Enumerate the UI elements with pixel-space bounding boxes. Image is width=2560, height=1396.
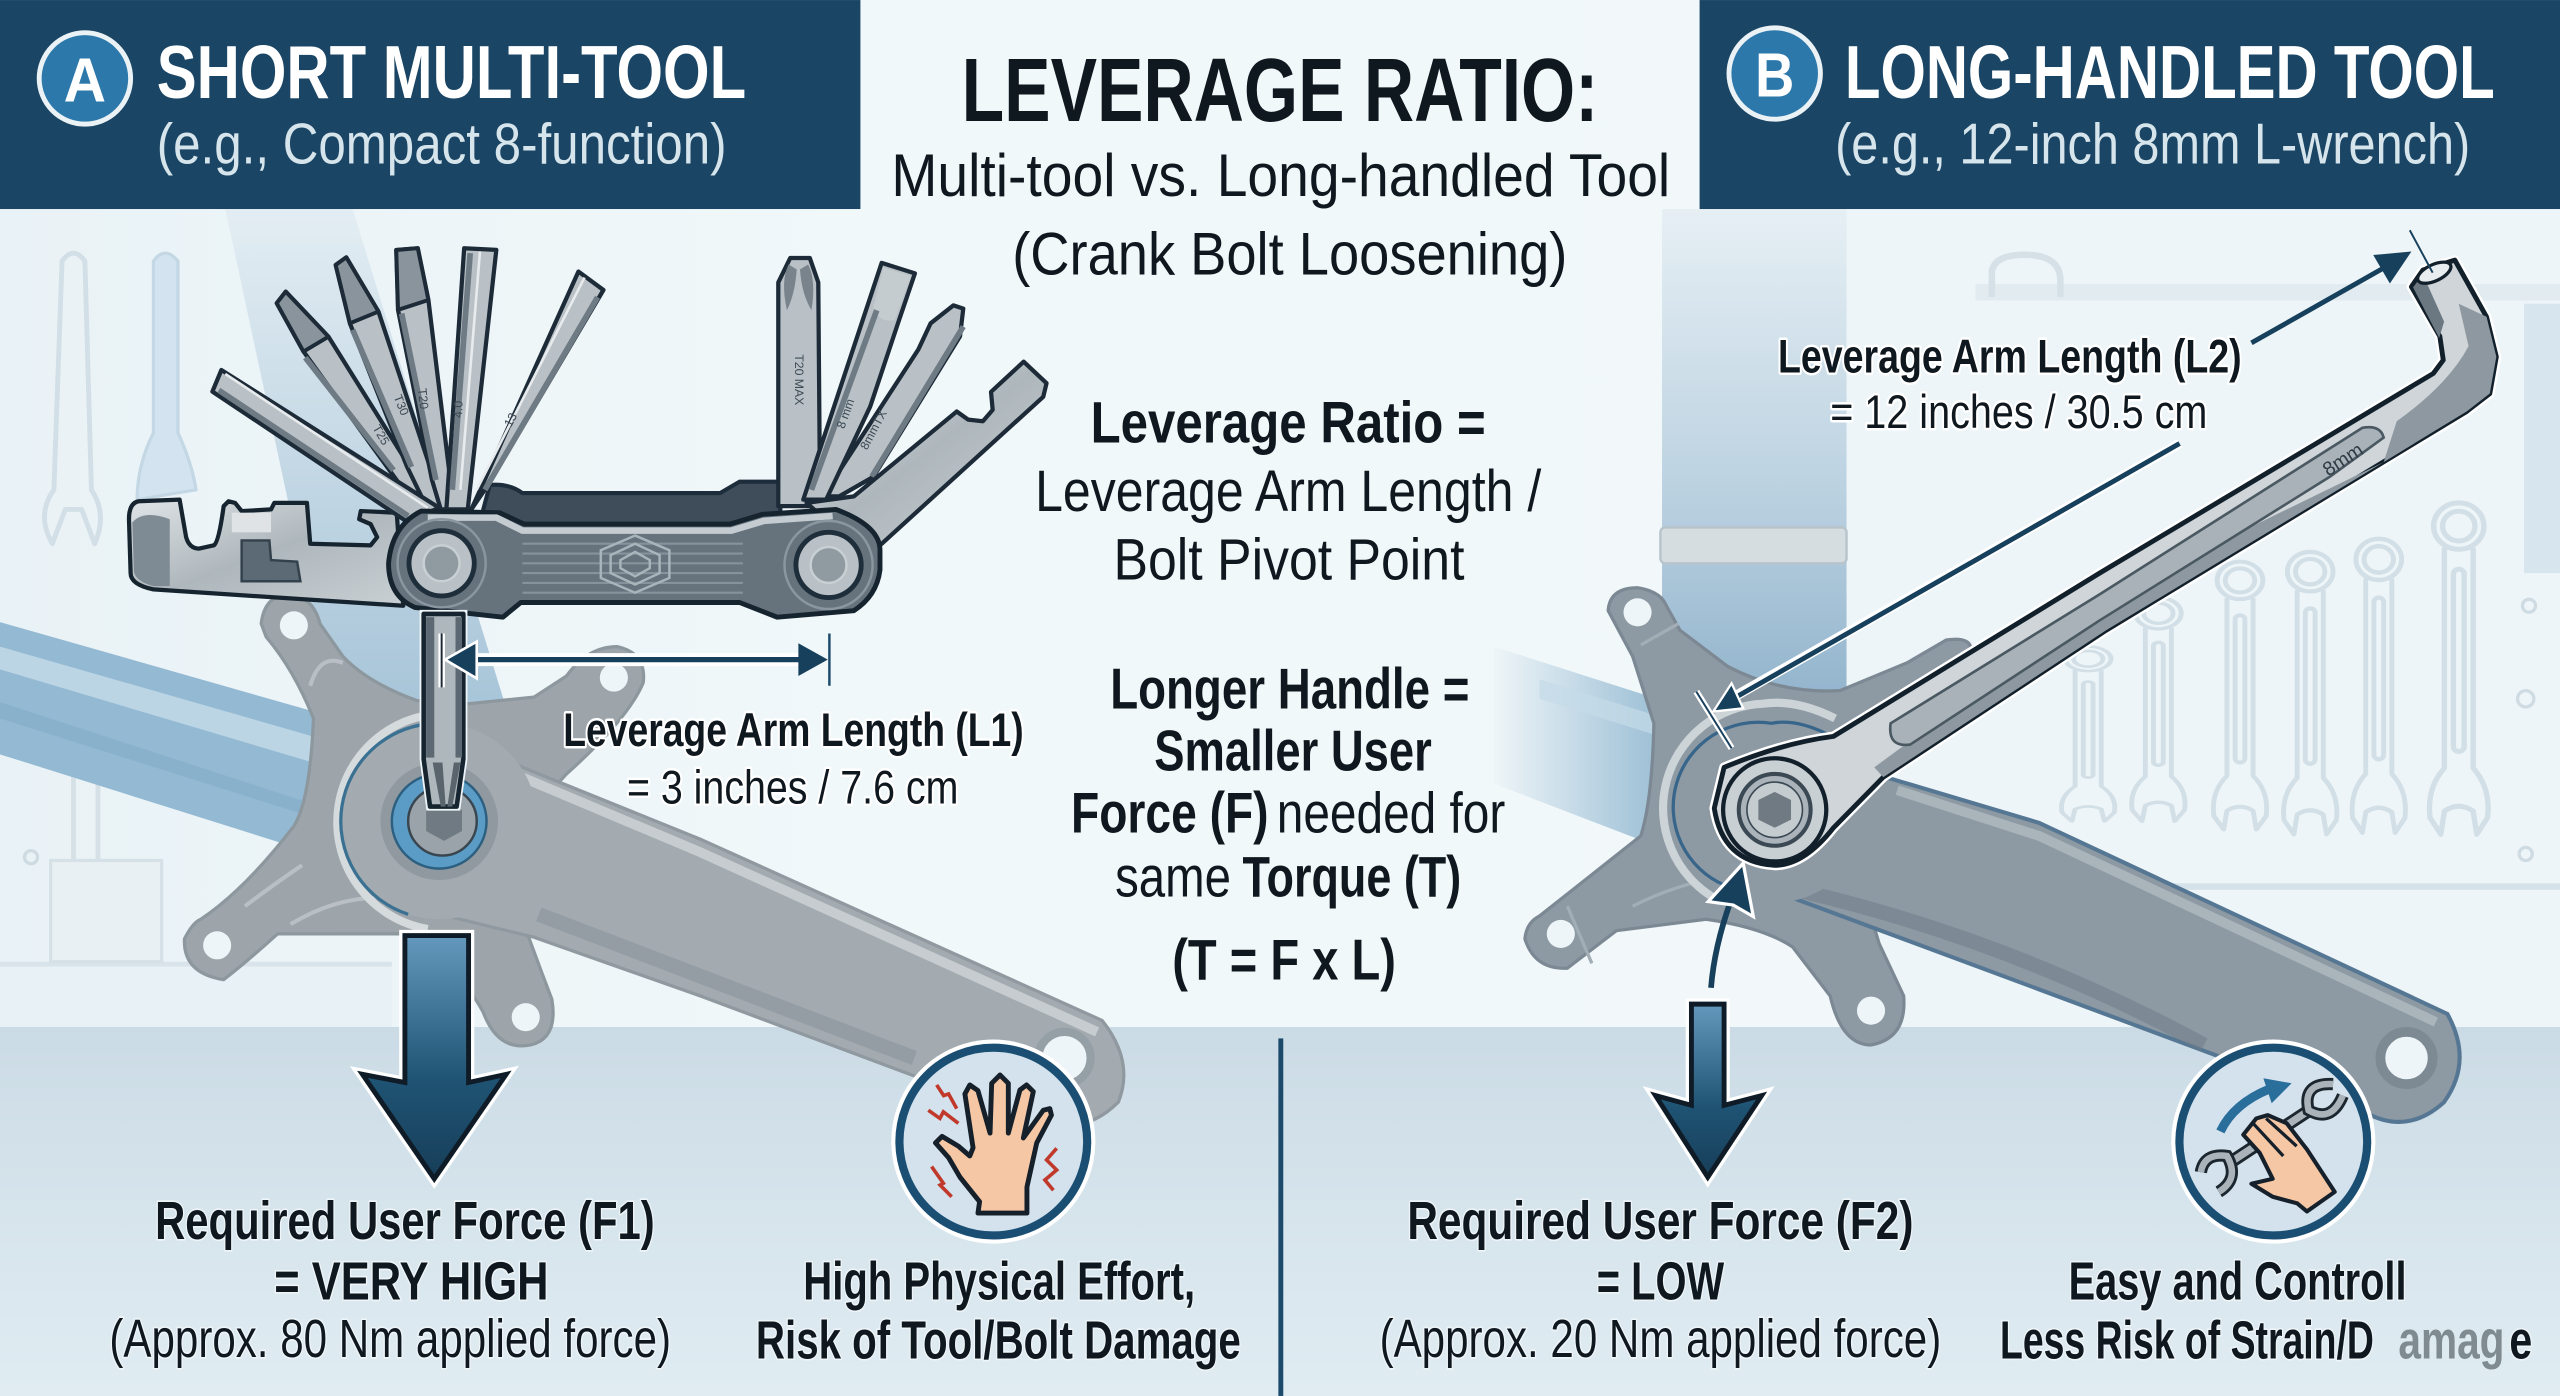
back plate: [483, 482, 780, 531]
longer handle explanation: Force (F): [1071, 782, 1269, 846]
badge B: B: [1755, 41, 1794, 110]
longer handle explanation: Torque (T): [1242, 845, 1461, 909]
multi-tool: [129, 248, 1047, 807]
longer handle explanation: (T = F x L): [1172, 929, 1396, 993]
right crankset: [1525, 588, 2460, 1122]
caption F2: Required User Force (F2): [1407, 1191, 1913, 1251]
caption F2: [1380, 1191, 1941, 1369]
pain marks: [928, 1085, 1057, 1197]
tool bit 3: T30: [391, 393, 412, 418]
caption effort: High Physical Effort,: [803, 1252, 1195, 1312]
label L2: [1778, 330, 2242, 439]
bottom panel background: [0, 1027, 2560, 1396]
pivot bolt right: [793, 530, 864, 600]
faded wrench left 1: [44, 253, 100, 544]
title: [891, 41, 1670, 287]
pozi bit: [823, 305, 963, 496]
right frame tube: [1494, 209, 1847, 862]
tool hex 5: [446, 248, 496, 509]
right crank rings: [1678, 714, 1868, 903]
tool bit 4: [396, 248, 454, 509]
chain tool: [129, 500, 403, 606]
faded wrench left 2: [137, 253, 196, 500]
header: long-handled tool: [1700, 0, 2560, 209]
tool bit 3: [336, 257, 444, 509]
wrench body: [1714, 260, 2496, 865]
tool bit 2: [277, 292, 434, 509]
caption F1: [109, 1191, 671, 1369]
L2 dimension arrows: [1696, 230, 2433, 748]
heading A: SHORT MULTI-TOOL: [157, 30, 746, 114]
caption F1: Required User Force (F1): [155, 1191, 655, 1251]
caption F1: (Approx. 80 Nm applied force): [109, 1309, 671, 1369]
caption control: amag: [2398, 1310, 2504, 1370]
hex logo: [601, 536, 669, 593]
title: LEVERAGE RATIO:: [962, 41, 1598, 141]
longer handle explanation: Longer Handle =: [1110, 658, 1469, 722]
label L1: = 3 inches / 7.6 cm: [627, 761, 958, 814]
turn arrow: [2220, 1089, 2269, 1131]
tire lever: [807, 362, 1047, 545]
handle slot: [1890, 427, 2384, 745]
faded wrench set right: [2061, 503, 2488, 834]
small wrench: [2201, 1084, 2343, 1192]
left crank bolt rings: [341, 723, 537, 919]
left spider: [184, 594, 644, 1046]
hand: [936, 1075, 1051, 1213]
longer handle explanation: needed for: [1277, 782, 1505, 846]
up arrow to crank: [1708, 863, 1753, 988]
formula text: [1035, 390, 1542, 593]
formula text: Bolt Pivot Point: [1113, 528, 1464, 593]
caption F1: = VERY HIGH: [274, 1252, 549, 1312]
pivot bolt left: [407, 528, 477, 598]
flat bit: 8 mm: [834, 397, 857, 430]
subheading A: (e.g., Compact 8-function): [157, 112, 727, 176]
flat bit: [803, 263, 915, 500]
caption effort: [756, 1252, 1241, 1370]
force arrow F2: [1656, 1004, 1762, 1177]
label L2: = 12 inches / 30.5 cm: [1830, 386, 2207, 439]
caption F2: = LOW: [1597, 1252, 1724, 1312]
wrench shaded underside: [1874, 304, 2496, 777]
title: Multi-tool vs. Long-handled Tool: [891, 141, 1670, 209]
formula text: Leverage Arm Length /: [1035, 459, 1542, 524]
label L1: Leverage Arm Length (L1): [563, 704, 1024, 757]
caption control: Less Risk of Strain/D: [2000, 1310, 2374, 1370]
subheading B: (e.g., 12-inch 8mm L-wrench): [1835, 112, 2470, 176]
tool bit 2: T25: [370, 422, 392, 448]
L1 dimension arrow: [442, 634, 829, 687]
divider: [1278, 1038, 1283, 1396]
pozi bit: 8mmTX: [857, 408, 890, 452]
tool bit 4: T20: [415, 387, 431, 410]
left fan tools: [212, 248, 603, 522]
phillips bit: T20 MAX: [792, 354, 806, 405]
long L-wrench: [1714, 258, 2496, 865]
badge A: [39, 33, 131, 124]
title: (Crank Bolt Loosening): [1012, 219, 1567, 287]
caption F2: (Approx. 20 Nm applied force): [1380, 1309, 1941, 1369]
caption control: [2000, 1252, 2532, 1370]
caption control: e: [2509, 1310, 2532, 1370]
wrench halo: [1714, 260, 2496, 865]
caption control: Easy and Controll: [2069, 1252, 2407, 1312]
wrench size mark: 8mm: [2319, 439, 2367, 481]
wrench head: [1723, 758, 1826, 861]
caption effort: Risk of Tool/Bolt Damage: [756, 1310, 1241, 1370]
force arrow F1: [362, 936, 506, 1179]
tool hex 1: [212, 370, 439, 522]
longer handle explanation: same: [1115, 845, 1231, 909]
tool hex 5: 4.0: [451, 400, 466, 418]
tool hex 6: 13: [501, 410, 520, 429]
faded wrenches on wall: [44, 253, 2488, 834]
header: short multi-tool: [0, 0, 860, 209]
label L2: Leverage Arm Length (L2): [1778, 330, 2242, 383]
badge A: A: [64, 46, 106, 115]
longer handle explanation: Smaller User: [1154, 720, 1432, 784]
icon: hand with wrench: [2171, 1040, 2375, 1244]
badge B: [1729, 28, 1820, 119]
left crank arm: [407, 746, 1124, 1125]
gripping hand: [2243, 1115, 2335, 1211]
right crank arm: [1753, 777, 2460, 1122]
right fan tools: [778, 258, 1047, 545]
icon: strained hand: [891, 1040, 1095, 1244]
formula text: Leverage Ratio =: [1091, 390, 1486, 455]
longer handle explanation: [1071, 658, 1505, 993]
label L1: [563, 704, 1024, 814]
body: [389, 509, 880, 617]
left frame tube: [0, 209, 509, 857]
tool hex 6: [471, 272, 603, 509]
bit in bolt: [424, 614, 463, 807]
right spider: [1525, 588, 1971, 1045]
wrench end socket: [2413, 274, 2444, 338]
phillips bit: [778, 258, 820, 506]
left crankset: [184, 594, 1124, 1125]
